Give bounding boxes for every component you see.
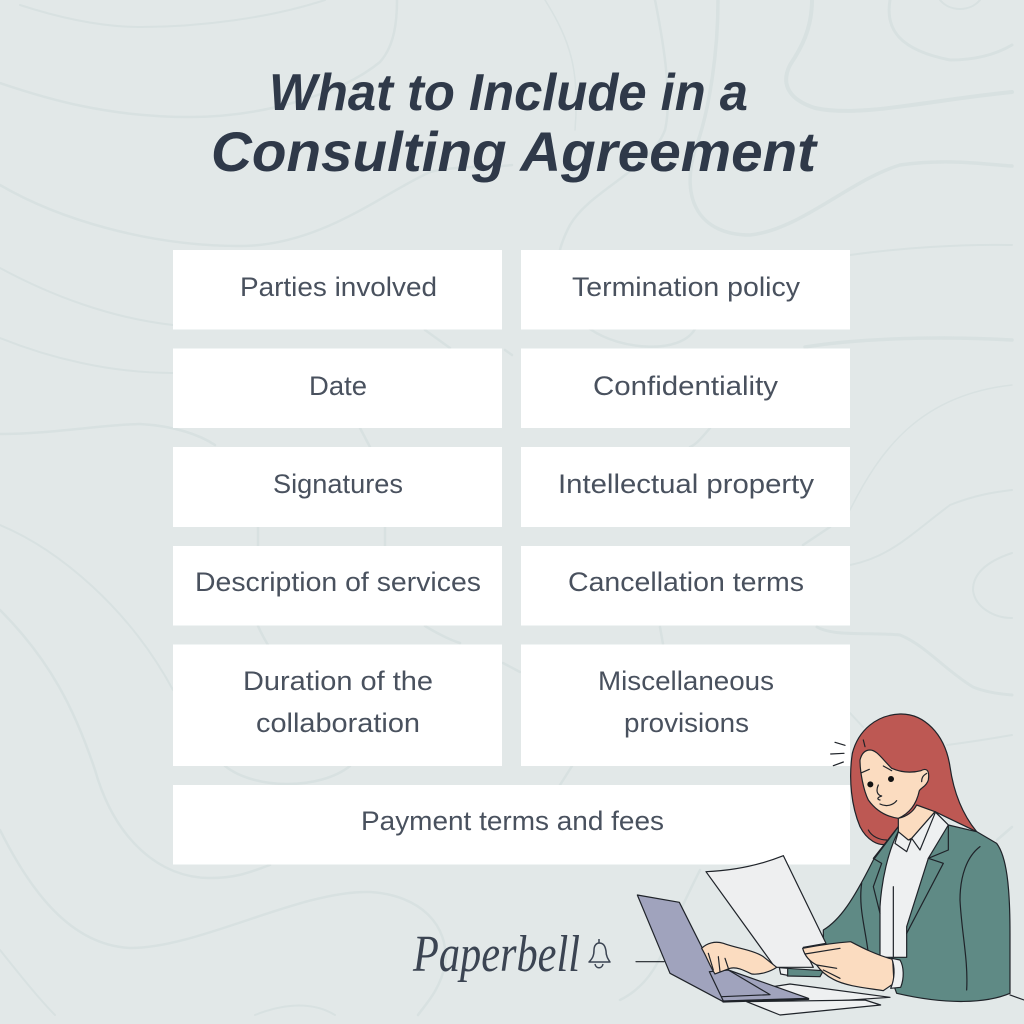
left shirt cuff: [779, 968, 788, 975]
hair lock: [863, 740, 887, 840]
card: Confidentiality: Confidentiality: [593, 371, 779, 401]
collar and lapel lines: [861, 813, 980, 990]
card: Intellectual property: [521, 447, 850, 527]
card: Confidentiality: [521, 348, 850, 428]
card: Cancellation terms: [521, 546, 850, 626]
card: Signatures: [173, 447, 502, 527]
card: Duration of the collaboration: Duration of the: [243, 666, 433, 696]
logo: Paperbell: Paperbell: [412, 926, 580, 983]
card: Date: [173, 348, 502, 428]
card: Miscellaneous provisions: provisions: [624, 708, 749, 738]
card: Payment terms and fees: [173, 785, 850, 864]
neck: [898, 805, 935, 840]
card: Parties involved: [173, 250, 502, 330]
face: [860, 750, 929, 818]
card: Termination policy: [521, 250, 850, 330]
desk papers: [752, 984, 890, 1005]
card: Intellectual property: Intellectual property: [558, 469, 815, 499]
card: Duration of the collaboration: [173, 644, 502, 766]
card: Date: Date: [309, 371, 367, 401]
panel: checklist grid: [173, 250, 850, 864]
shirt: [880, 812, 948, 957]
jacket: [823, 812, 1010, 1001]
icon: bell: [589, 939, 610, 968]
title: What to Include in a: [269, 64, 748, 122]
title: [211, 64, 818, 183]
card: Miscellaneous provisions: Miscellaneous: [598, 666, 774, 696]
card: Duration of the collaboration: collaboration: [256, 708, 420, 738]
typing hand: [702, 942, 777, 974]
card: Parties involved: Parties involved: [240, 272, 437, 302]
facial features: [862, 766, 927, 806]
card: Description of services: Description of services: [195, 567, 481, 597]
document held in hand: [706, 856, 826, 967]
forearm sleeve: [787, 968, 823, 977]
holding hand: [803, 942, 894, 991]
laptop keyboard: [709, 970, 808, 1001]
illustration: consultant woman reading at laptop: [636, 714, 1024, 1015]
card: Description of services: [173, 546, 502, 626]
card: Termination policy: Termination policy: [572, 272, 801, 302]
desk line: [636, 962, 1024, 1000]
title: Consulting Agreement: [211, 120, 818, 183]
card: Cancellation terms: Cancellation terms: [568, 567, 804, 597]
hair: [851, 714, 977, 845]
card: Payment terms and fees: Payment terms and fees: [361, 806, 664, 836]
card: Miscellaneous provisions: [521, 644, 850, 766]
icon: attention marks: [831, 742, 845, 766]
laptop screen: [637, 895, 723, 1002]
shirt cuff: [891, 958, 903, 988]
card: Signatures: Signatures: [273, 469, 403, 499]
